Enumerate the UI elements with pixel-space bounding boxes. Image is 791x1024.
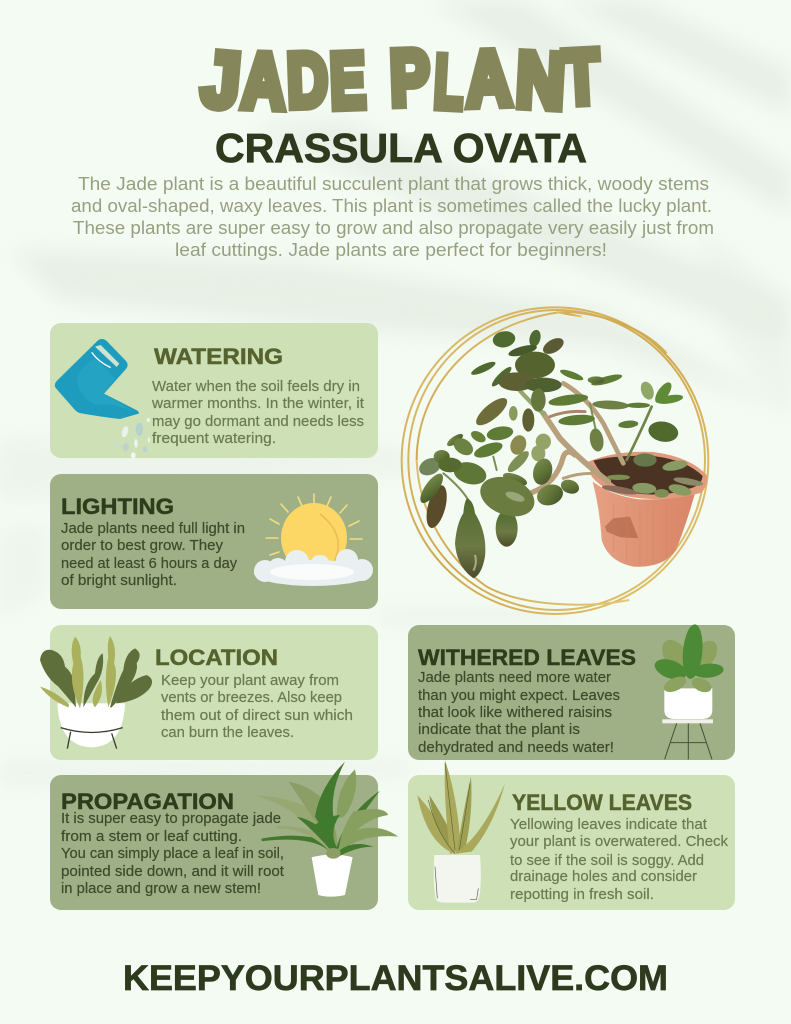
text: lighting <box>61 521 245 589</box>
panel: withered leaves <box>408 624 735 760</box>
text: withered leaves: dehydrated and needs water! <box>418 740 614 756</box>
title: JADE PLANT: A <box>240 36 287 125</box>
text: propagation: You can simply place a leaf in soil, <box>61 846 284 862</box>
text: yellow leaves: Yellowing leaves indicate that <box>510 817 707 833</box>
heading: watering: WATERING <box>154 344 283 369</box>
title: JADE PLANT: P <box>389 33 431 122</box>
text: withered leaves: Jade plants need more water <box>418 670 611 686</box>
panel: watering <box>50 323 378 458</box>
icon: potted plant with stand <box>40 636 152 749</box>
icon: sun and cloud <box>254 494 373 586</box>
text: location: them out of direct sun which <box>161 708 353 724</box>
heading: propagation: PROPAGATION <box>61 789 234 814</box>
text: withered leaves <box>418 670 620 756</box>
text: watering: Water when the soil feels dry in <box>152 379 360 395</box>
text: propagation: from a stem or leaf cutting. <box>61 829 242 845</box>
heading: withered leaves: WITHERED LEAVES <box>418 645 636 670</box>
panel: propagation <box>50 762 398 910</box>
text: lighting: need at least 6 hours a day <box>61 556 238 572</box>
text: yellow leaves: your plant is overwatered. Check <box>510 834 729 850</box>
text: location: vents or breezes. Also keep <box>161 690 342 706</box>
subtitle: CRASSULA OVATA: CRASSULA OVATA <box>215 125 587 171</box>
text: lighting: Jade plants need full light in <box>61 521 245 537</box>
title: JADE PLANT: L <box>432 40 466 125</box>
jade leaves <box>416 329 704 578</box>
heading: yellow leaves: YELLOW LEAVES <box>512 790 692 815</box>
text: watering <box>151 379 364 447</box>
panel: lighting <box>50 474 378 609</box>
heading: location: LOCATION <box>155 645 278 670</box>
text: withered leaves: than you might expect. Leaves <box>418 688 620 704</box>
text: propagation <box>61 811 284 897</box>
intro paragraph <box>71 173 714 260</box>
title: JADE PLANT: T <box>561 34 602 121</box>
text: propagation: in place and grow a new stem! <box>61 881 261 897</box>
text: location: Keep your plant away from <box>161 673 339 689</box>
icon: plant on stool <box>652 624 724 759</box>
text: lighting: order to best grow. They <box>61 538 224 554</box>
title: JADE PLANT: N <box>514 36 567 126</box>
stems <box>443 377 652 500</box>
text: lighting: of bright sunlight. <box>61 573 177 589</box>
icon: leafy plant in white pot <box>253 762 398 897</box>
text: withered leaves: indicate that the plant is <box>418 722 580 738</box>
title: JADE PLANT: E <box>329 38 367 126</box>
text: watering: warmer months. In the winter, it <box>151 396 364 412</box>
text: yellow leaves: drainage holes and consider <box>510 869 697 885</box>
photo: jade plant in terracotta pot with gold ring <box>402 307 708 614</box>
text: yellow leaves <box>510 817 729 903</box>
text: location: can burn the leaves. <box>161 725 294 741</box>
title: JADE PLANT: J <box>199 36 244 125</box>
icon: watering can <box>55 339 150 458</box>
intro paragraph: These plants are super easy to grow and also propagate very easily just from <box>73 217 714 238</box>
title: JADE PLANT: D <box>286 37 329 124</box>
terracotta pot <box>588 452 707 567</box>
gold ring <box>402 307 708 614</box>
text: withered leaves: that look like withered raisins <box>418 705 612 721</box>
intro paragraph: and oval-shaped, waxy leaves. This plant is sometimes called the lucky plant. <box>71 195 712 216</box>
text: yellow leaves: to see if the soil is soggy. Add <box>510 853 704 869</box>
text: watering: may go dormant and needs less <box>152 414 364 430</box>
text: location <box>161 673 353 741</box>
panel: yellow leaves <box>408 760 735 910</box>
footer url: KEEPYOURPLANTSALIVE.COM <box>123 959 668 998</box>
heading: lighting: LIGHTING <box>61 494 174 519</box>
title: JADE PLANT: A <box>465 34 513 123</box>
intro paragraph: The Jade plant is a beautiful succulent plant that grows thick, woody stems <box>78 173 709 194</box>
icon: snake plant in speckled pot <box>417 760 505 903</box>
text: propagation: It is super easy to propagate jade <box>61 811 281 827</box>
text: watering: frequent watering. <box>152 431 276 447</box>
title: JADE PLANT <box>199 33 602 126</box>
text: yellow leaves: repotting in fresh soil. <box>510 887 654 903</box>
intro paragraph: leaf cuttings. Jade plants are perfect for beginners! <box>175 239 607 260</box>
panel: location <box>40 625 378 760</box>
text: propagation: pointed side down, and it will root <box>61 864 284 880</box>
